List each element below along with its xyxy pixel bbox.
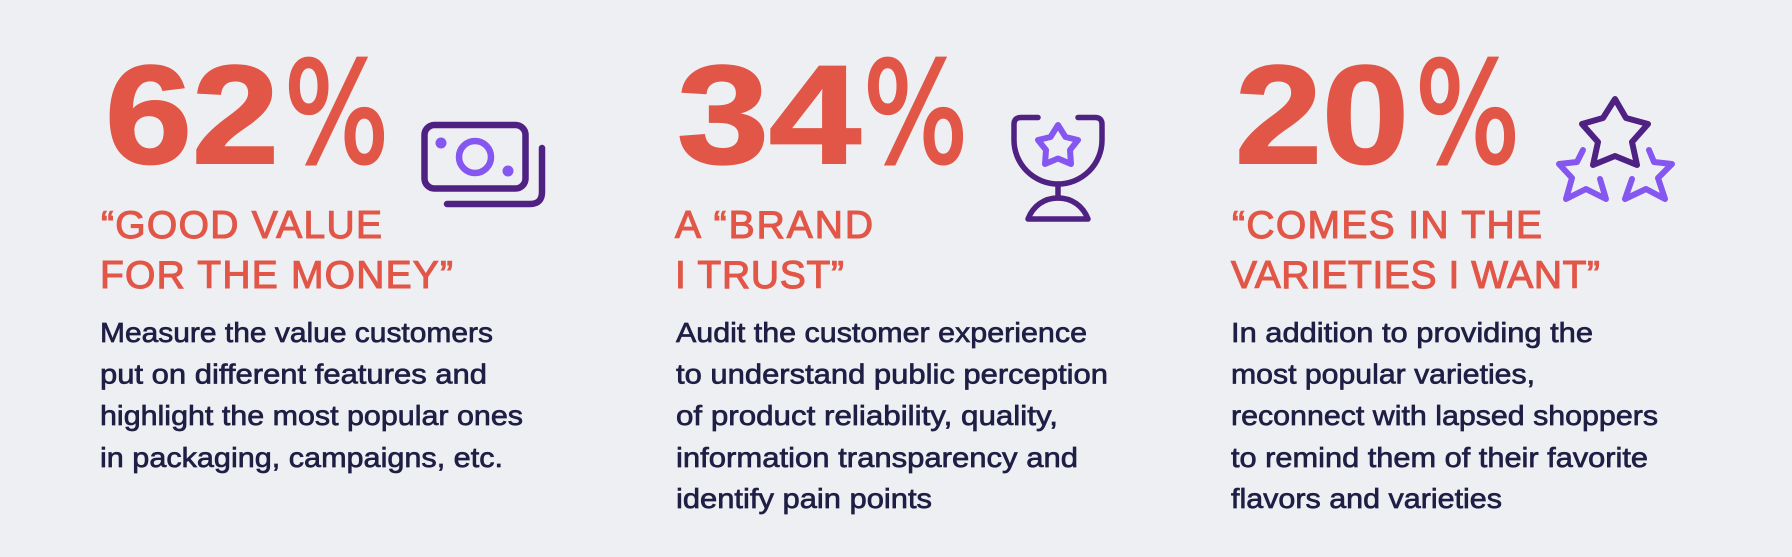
text block: varieties advice: reconnect with lapsed shoppers: [1231, 400, 1658, 431]
panel: comes in the varieties I want: [1231, 33, 1672, 514]
text block: value advice: Measure the value customers: [100, 317, 493, 348]
stat: 34%: [677, 33, 968, 196]
stat: 62%: [105, 33, 389, 196]
heading: a brand I trust: I TRUST”: [675, 254, 844, 297]
text block: varieties advice: In addition to providing the: [1231, 317, 1593, 348]
text block: value advice: in packaging, campaigns, etc.: [100, 442, 503, 473]
text block: trust advice: information transparency and: [676, 442, 1078, 473]
text block: trust advice: identify pain points: [676, 483, 932, 514]
stat: 34%: %: [863, 33, 968, 196]
heading: a brand I trust: [675, 204, 873, 297]
stat: 20%: 20: [1235, 36, 1409, 193]
heading: good value for the money: [100, 204, 453, 297]
text block: value advice: put on different features and: [100, 358, 487, 390]
heading: comes in the varieties I want: VARIETIES I WANT”: [1231, 254, 1600, 297]
text block: value advice: highlight the most popular ones: [100, 400, 523, 431]
stat: 62%: 62: [105, 36, 279, 193]
text block: varieties advice: [1231, 317, 1658, 514]
stat: 20%: [1235, 33, 1520, 196]
heading: comes in the varieties I want: [1231, 204, 1600, 297]
text block: value advice: [100, 317, 523, 473]
heading: good value for the money: FOR THE MONEY”: [100, 254, 453, 297]
text block: trust advice: [676, 317, 1108, 514]
text block: trust advice: to understand public perception: [676, 358, 1108, 390]
text block: trust advice: Audit the customer experience: [676, 317, 1087, 348]
icon: banknotes: [424, 125, 542, 204]
icon: trophy with star: [1014, 118, 1102, 219]
text block: varieties advice: flavors and varieties: [1231, 483, 1502, 514]
icon: three stars: [1559, 99, 1672, 199]
heading: good value for the money: “GOOD VALUE: [101, 204, 382, 247]
panel: brand I trust: [675, 33, 1108, 514]
text block: varieties advice: to remind them of their favorite: [1231, 442, 1648, 473]
panel: good value for the money: [100, 33, 542, 473]
stat: 34%: 34: [677, 36, 861, 193]
stat: 20%: %: [1415, 33, 1520, 196]
text block: varieties advice: most popular varieties,: [1231, 358, 1535, 390]
stat: 62%: %: [284, 33, 389, 196]
heading: comes in the varieties I want: “COMES IN THE: [1232, 204, 1542, 247]
text block: trust advice: of product reliability, quality,: [676, 400, 1058, 431]
heading: a brand I trust: A “BRAND: [675, 204, 873, 247]
